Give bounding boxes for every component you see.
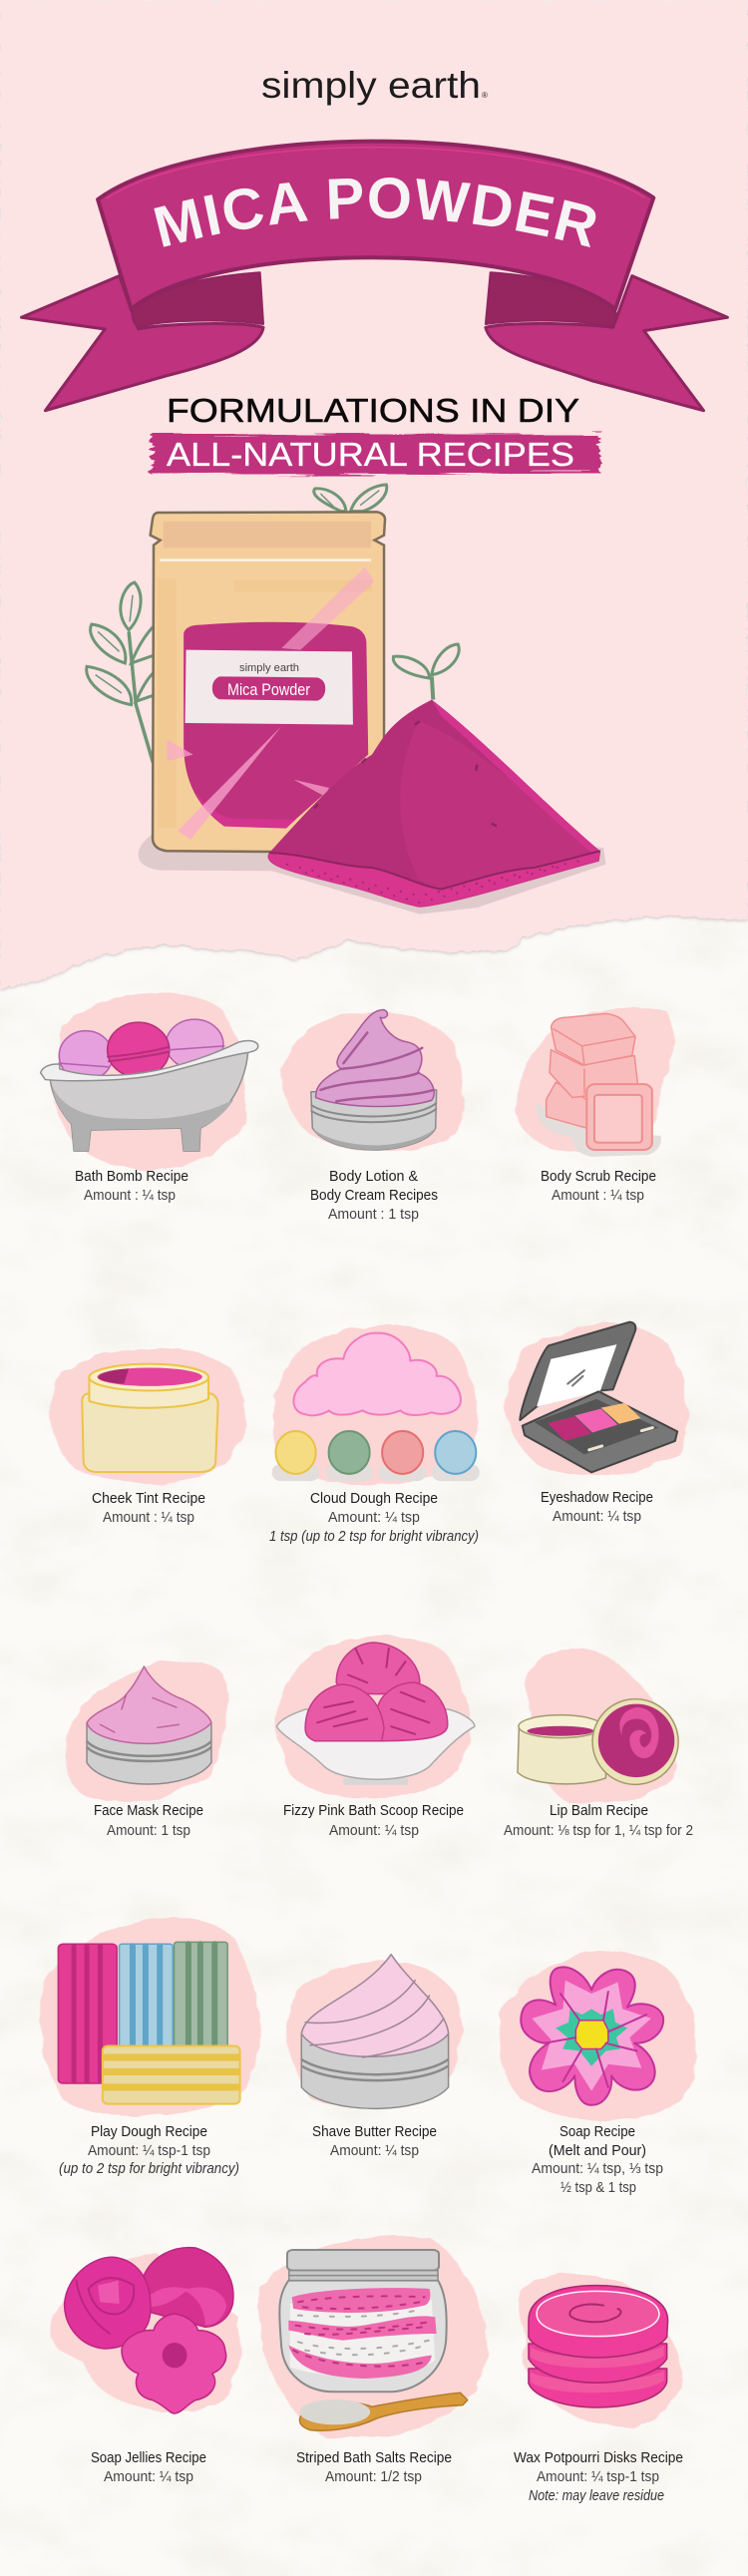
icon: lip balm pots [518,1650,678,1805]
subtitle brush stroke with ALL-NATURAL RECIPES: ALL-NATURAL RECIPES [167,436,574,473]
label: bath bomb: Bath Bomb Recipe [75,1168,188,1185]
label: play dough: (up to 2 tsp for bright vibrancy) [59,2160,239,2177]
shadow [139,831,605,915]
product illustration: bag and powder pile [87,485,605,915]
label: wax potpourri disks [514,2449,683,2504]
label: cloud dough: 1 tsp (up to 2 tsp for bright vibrancy) [269,1528,479,1545]
icon: melt and pour soap flower [498,1951,697,2120]
label: shave butter: Amount: ¼ tsp [330,2142,419,2159]
panel: recipe icons row 5 [48,2236,682,2438]
label: striped bath salts: Amount: 1/2 tsp [325,2468,422,2485]
label: play dough: Play Dough Recipe [91,2123,207,2140]
logo: simply earth: simply earth [261,65,481,106]
label: bath bomb [75,1168,188,1204]
label: wax potpourri disks: Amount: ¼ tsp-1 tsp [537,2468,659,2485]
label: soap jellies: Soap Jellies Recipe [91,2449,206,2466]
pouch highlights [281,566,374,650]
label: eyeshadow [541,1489,653,1525]
right ribbon fold [486,272,615,327]
label: fizzy pink bath scoop: Amount: ¼ tsp [329,1822,419,1839]
label: wax potpourri disks: Note: may leave residue [529,2487,664,2504]
labels: row 4 [59,2123,663,2196]
icon: cloud dough [272,1325,480,1484]
icon: wooden spoon [299,2392,468,2430]
label: lip balm: Lip Balm Recipe [550,1802,648,1819]
label: shave butter: Shave Butter Recipe [312,2123,437,2140]
powder pile body [269,700,600,890]
ribbon banner [22,142,727,411]
pouch label text: Mica Powder [227,680,310,699]
label: fizzy pink bath scoop: Fizzy Pink Bath Scoop Recipe [283,1802,464,1819]
icon: bath bomb tub [41,993,258,1170]
subtitle: FORMULATIONS IN DIY: FORMULATIONS IN DIY [167,392,579,429]
icon: branch left [87,582,155,765]
pouch label text [227,662,310,699]
icon: body scrub soap cubes [516,1007,674,1157]
label: face mask: Amount: 1 tsp [107,1822,190,1839]
icon: sprout on pile [393,644,459,700]
left ribbon fold [133,272,263,327]
icon: cheek tint jar [51,1348,244,1484]
label: wax potpourri disks: Wax Potpourri Disks Recipe [514,2449,683,2466]
label: cloud dough [269,1490,479,1545]
icon: kraft pouch [151,512,385,852]
label: eyeshadow: Eyeshadow Recipe [541,1489,653,1506]
label: striped bath salts [296,2449,452,2485]
label: cheek tint: Amount : ¼ tsp [103,1509,194,1526]
label: body lotion: Body Lotion & [329,1168,418,1185]
label: cheek tint: Cheek Tint Recipe [92,1490,205,1507]
label: lip balm [504,1802,693,1839]
pouch powder window [184,622,368,828]
label: play dough [59,2123,239,2177]
label: lip balm: Amount: ⅛ tsp for 1, ¼ tsp for 2 [504,1822,693,1839]
powder pile base [268,851,600,907]
icon: body lotion tin [281,1010,465,1152]
label: bath bomb: Amount : ¼ tsp [84,1187,176,1204]
icon: eyeshadow palette [506,1322,687,1475]
label: face mask [94,1802,203,1839]
label: body lotion: Amount : 1 tsp [328,1206,419,1223]
panel: recipe icons rows 1 and 2 [41,993,687,1484]
label: face mask: Face Mask Recipe [94,1802,203,1819]
label: soap jellies [91,2449,206,2485]
pink header background with torn edge [0,0,748,989]
label: play dough: Amount: ¼ tsp-1 tsp [88,2142,210,2159]
label: fizzy pink bath scoop [283,1802,464,1839]
label: body scrub: Body Scrub Recipe [541,1168,656,1185]
icon: fizzy pink bath scoops [276,1637,475,1798]
main ribbon band [98,142,653,309]
labels: row 5 [91,2449,683,2504]
label: eyeshadow: Amount: ¼ tsp [553,1508,641,1525]
label: cloud dough: Amount: ¼ tsp [328,1509,420,1526]
pouch label [186,650,353,725]
label: cloud dough: Cloud Dough Recipe [310,1490,438,1507]
labels: row 1 [75,1168,656,1223]
label: body lotion [310,1168,438,1223]
label: soap melt and pour [532,2123,663,2196]
title: MICA POWDER: MICA POWDER [154,178,596,247]
right ribbon tail [486,276,727,411]
label: body scrub [541,1168,656,1204]
label: striped bath salts: Striped Bath Salts Recipe [296,2449,452,2466]
panel: recipe icons rows 3 and 4 [40,1637,697,2120]
icon: face mask tin [65,1660,228,1801]
icon: wax potpourri disks [520,2274,682,2427]
label: cheek tint [92,1490,205,1526]
label: soap melt and pour: Soap Recipe [560,2123,635,2140]
label: soap melt and pour: Amount: ¼ tsp, ⅓ tsp [532,2160,663,2177]
label: body scrub: Amount : ¼ tsp [552,1187,644,1204]
pouch label text: simply earth [239,662,299,674]
left ribbon tail [22,276,263,411]
icon: shave butter tin [287,1955,462,2108]
icon: striped bath salts jar [258,2236,487,2438]
icon: play dough bars [40,1917,259,2116]
label: soap melt and pour: (Melt and Pour) [549,2142,646,2159]
label: shave butter [312,2123,437,2159]
logo: simply earth: ® [482,91,488,100]
icon: soap jellies [48,2248,240,2413]
labels: row 2 [92,1489,653,1545]
label: soap melt and pour: ½ tsp & 1 tsp [561,2179,636,2196]
label: soap jellies: Amount: ¼ tsp [104,2468,193,2485]
labels: row 3 [94,1802,693,1839]
icon: leaves top [314,485,387,512]
label: body lotion: Body Cream Recipes [310,1187,438,1204]
